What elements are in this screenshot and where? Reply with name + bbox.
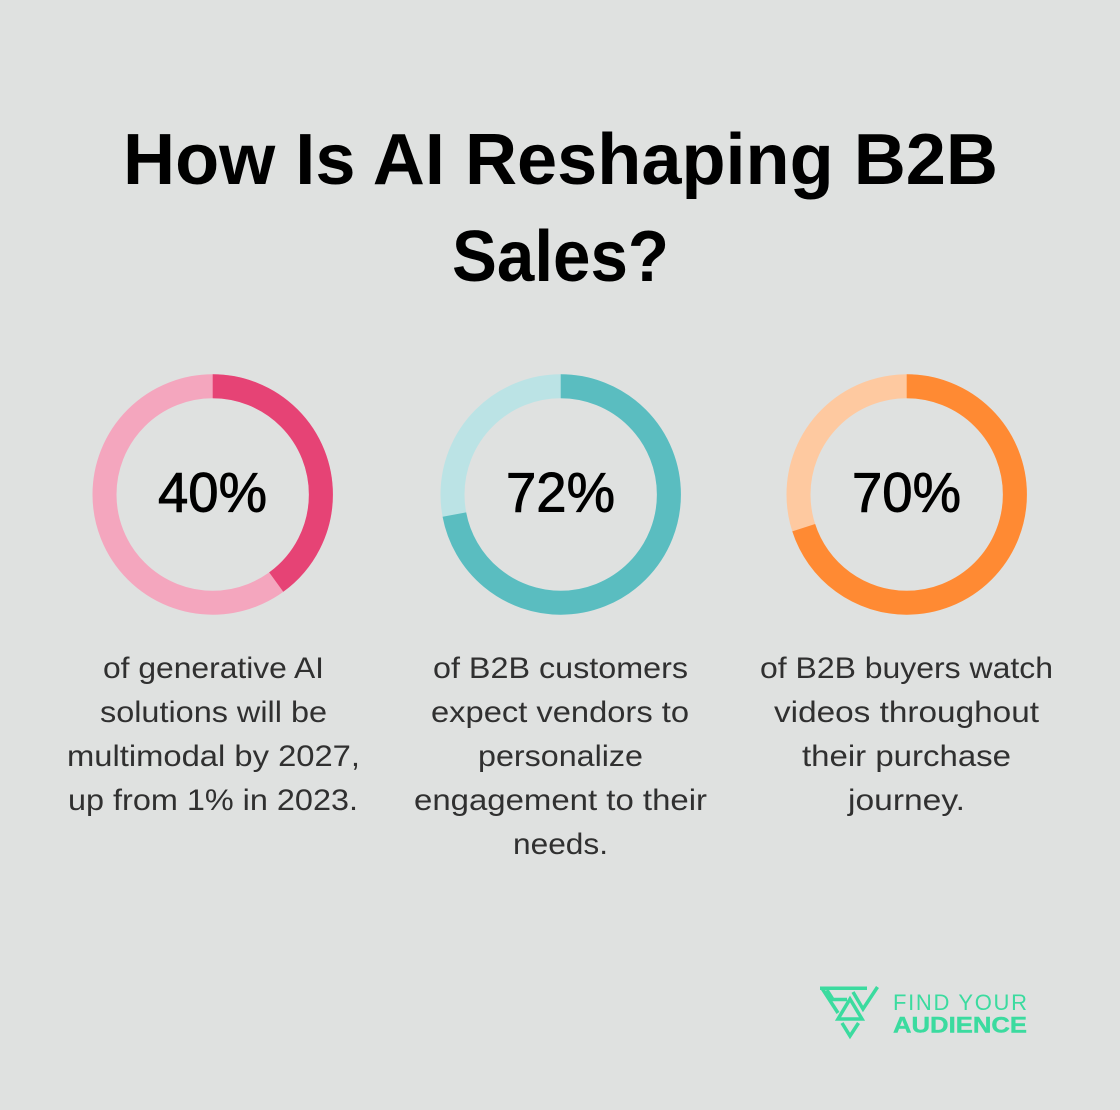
text: logo wordmark bbox=[893, 990, 1027, 1038]
title: Sales? bbox=[452, 217, 669, 297]
text: 40% description: up from 1% in 2023. bbox=[68, 784, 358, 817]
text: 72% description: expect vendors to bbox=[431, 696, 689, 729]
text: 40% description: of generative AI bbox=[103, 652, 324, 685]
text: 72% description: of B2B customers bbox=[433, 652, 688, 685]
text: 72% description: needs. bbox=[513, 828, 608, 861]
donut chart: 70% bbox=[798, 386, 1015, 603]
text: 70% description bbox=[760, 652, 1053, 817]
donut chart: 72% bbox=[452, 386, 669, 603]
panel: 72% stat bbox=[414, 386, 707, 861]
donut chart: 70%: 70% bbox=[852, 460, 961, 524]
text: 40% description bbox=[67, 652, 360, 817]
text: 70% description: of B2B buyers watch bbox=[760, 652, 1053, 685]
logo: Find Your Audience bbox=[820, 987, 1027, 1038]
text: 70% description: journey. bbox=[847, 784, 965, 817]
text: 40% description: solutions will be bbox=[100, 696, 327, 729]
text: 70% description: their purchase bbox=[802, 740, 1011, 773]
text: 40% description: multimodal by 2027, bbox=[67, 740, 360, 773]
panel: 40% stat bbox=[67, 386, 360, 817]
panel: 70% stat bbox=[760, 386, 1053, 817]
text: logo wordmark: FIND YOUR bbox=[893, 990, 1027, 1015]
donut chart: 40% bbox=[104, 386, 321, 603]
title bbox=[123, 120, 998, 297]
text: 72% description: personalize bbox=[478, 740, 643, 773]
text: 72% description bbox=[414, 652, 707, 861]
donut chart: 40%: 40% bbox=[158, 460, 267, 524]
text: 70% description: videos throughout bbox=[774, 696, 1040, 729]
text: logo wordmark: AUDIENCE bbox=[893, 1012, 1027, 1038]
text: 72% description: engagement to their bbox=[414, 784, 707, 817]
title: How Is AI Reshaping B2B bbox=[123, 120, 998, 200]
donut chart: 72%: 72% bbox=[506, 460, 615, 524]
icon: triangle logo mark bbox=[820, 987, 878, 1036]
